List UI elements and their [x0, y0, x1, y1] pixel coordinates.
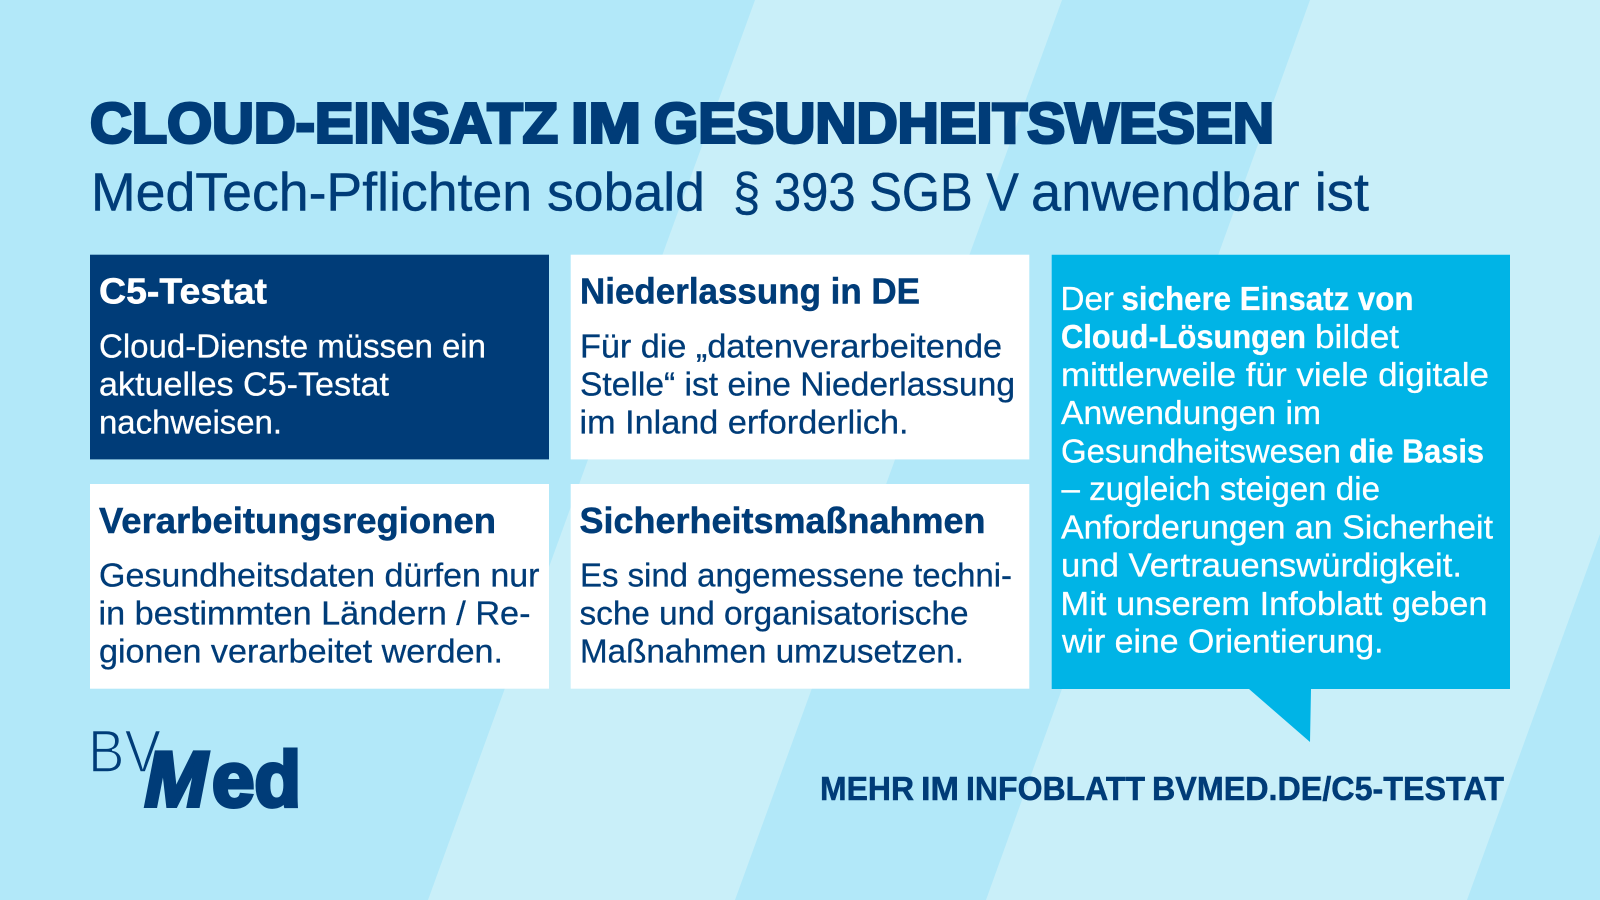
text: callout body: und Vertrauenswürdigkeit.	[1061, 546, 1462, 584]
text: Niederlassung body: Für die „datenverarbeitende	[580, 327, 1002, 364]
title	[90, 92, 1274, 156]
text: callout body: Gesundheitswesen	[1061, 432, 1341, 470]
panel: Verarbeitungsregionen	[90, 484, 549, 689]
text: C5-Testat body: nachweisen.	[99, 403, 282, 440]
text: Sicherheitsmaßnahmen body: Es sind angemessene techni-	[580, 556, 1012, 593]
text: Niederlassung body: Stelle“ ist eine Niederlassung	[580, 365, 1015, 402]
text: Niederlassung body	[580, 327, 1015, 440]
subtitle: anwendbar ist	[1031, 162, 1369, 222]
text: callout body: Anforderungen an Sicherheit	[1061, 508, 1493, 546]
text: callout body: bildet	[1315, 318, 1399, 355]
footer link text: BVMED.DE/C5-TESTAT	[1152, 771, 1505, 808]
subtitle: § 393 SGB V	[733, 162, 1019, 222]
text: callout body: mittlerweile für viele digitale	[1061, 356, 1489, 393]
text: Verarbeitungsregionen body	[98, 556, 540, 669]
text: callout body	[1060, 280, 1493, 660]
heading: Sicherheitsmaßnahmen: Sicherheitsmaßnahmen	[580, 500, 986, 541]
text: Verarbeitungsregionen body: gionen verarbeitet werden.	[99, 632, 503, 669]
text: callout body: Der	[1060, 280, 1114, 317]
text: Sicherheitsmaßnahmen body: sche und organisatorische	[580, 594, 968, 631]
title: GESUNDHEITSWESEN	[654, 92, 1274, 156]
footer link text	[820, 771, 1505, 808]
heading: Niederlassung in DE: Niederlassung in DE	[580, 270, 920, 312]
text: callout body: die Basis	[1349, 432, 1484, 470]
text: Sicherheitsmaßnahmen body: Maßnahmen umzusetzen.	[580, 632, 964, 669]
text: C5-Testat body: Cloud-Dienste müssen ein	[99, 327, 486, 364]
panel: C5-Testat	[90, 255, 549, 459]
callout: speech bubble	[1052, 255, 1510, 742]
heading: Verarbeitungsregionen: Verarbeitungsregionen	[99, 500, 496, 541]
text: callout body: Mit unserem Infoblatt geben	[1060, 585, 1488, 622]
text: Niederlassung body: im Inland erforderlich.	[580, 403, 908, 440]
text: callout body: wir eine Orientierung.	[1061, 623, 1384, 660]
text: Sicherheitsmaßnahmen body	[580, 556, 1012, 669]
heading: C5-Testat: C5-Testat	[99, 270, 267, 312]
text: Verarbeitungsregionen body: Gesundheitsdaten dürfen nur	[99, 556, 540, 593]
title: IM	[571, 92, 641, 156]
footer link text: MEHR	[820, 771, 914, 808]
logo: BVMed: ed	[212, 735, 301, 823]
text: callout body: – zugleich steigen die	[1062, 470, 1380, 507]
panel: Sicherheitsmaßnahmen	[571, 484, 1029, 689]
subtitle: MedTech-Pflichten sobald	[91, 162, 705, 222]
subtitle	[91, 162, 1369, 222]
title: CLOUD-EINSATZ	[90, 92, 558, 156]
footer link text: INFOBLATT	[966, 771, 1146, 808]
logo: BVMed: BV	[88, 718, 161, 785]
text: callout body: sichere Einsatz von	[1122, 280, 1414, 317]
text: C5-Testat body: aktuelles C5-Testat	[99, 365, 389, 402]
text: callout body: Cloud-Lösungen	[1061, 318, 1306, 355]
panel: Niederlassung in DE	[571, 255, 1029, 459]
text: Verarbeitungsregionen body: in bestimmten Ländern / Re-	[98, 594, 530, 631]
logo: BVMed: M	[138, 736, 217, 823]
text: callout body: Anwendungen im	[1061, 394, 1321, 431]
footer link text: IM	[921, 771, 959, 808]
text: C5-Testat body	[99, 327, 486, 440]
logo: BVMed	[88, 718, 301, 823]
